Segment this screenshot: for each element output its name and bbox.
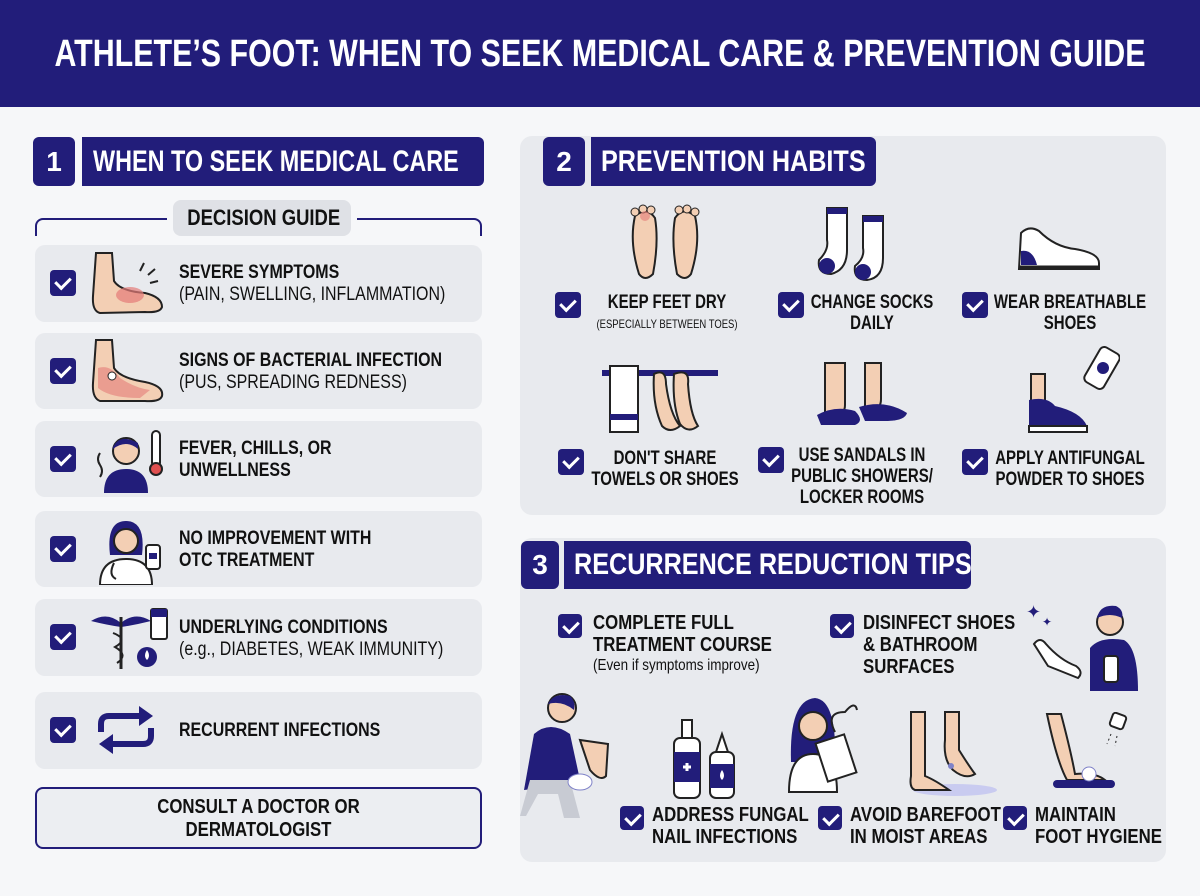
section 1 header: 1 bbox=[46, 146, 62, 177]
section 2 header bbox=[543, 137, 876, 186]
item: fungal nail infections: NAIL INFECTIONS bbox=[652, 826, 797, 848]
callout: consult a doctor bbox=[35, 787, 482, 849]
icon: woman with checklist bbox=[788, 698, 858, 793]
item: keep feet dry: KEEP FEET DRY bbox=[608, 292, 726, 313]
item: foot hygiene: FOOT HYGIENE bbox=[1035, 826, 1162, 848]
icon: man spraying shoe: ✦ bbox=[1026, 602, 1041, 622]
item: avoid barefoot bbox=[818, 804, 1001, 848]
row: recurrent infections: RECURRENT INFECTIONS bbox=[179, 720, 380, 741]
icon: person with thermometer bbox=[97, 430, 163, 493]
item: change socks daily: CHANGE SOCKS bbox=[811, 292, 933, 313]
item: keep feet dry bbox=[555, 292, 738, 331]
item: sandals in showers: PUBLIC SHOWERS/ bbox=[791, 466, 933, 487]
section 3 header bbox=[521, 541, 972, 589]
icon: kneeling man washing foot bbox=[520, 693, 610, 818]
icon: shoe with powder bbox=[1028, 346, 1120, 433]
row: bacterial infection bbox=[35, 333, 482, 409]
item: disinfect shoes: SURFACES bbox=[863, 656, 954, 678]
item: complete treatment course: TREATMENT COURSE bbox=[593, 634, 772, 656]
item: antifungal powder: APPLY ANTIFUNGAL bbox=[995, 448, 1145, 469]
section 1 header: WHEN TO SEEK MEDICAL CARE bbox=[93, 145, 459, 178]
item: breathable shoes bbox=[962, 292, 1146, 334]
item: complete treatment course: (Even if symptoms improve) bbox=[593, 657, 760, 674]
row: underlying conditions: UNDERLYING CONDITIONS bbox=[179, 617, 388, 638]
icon: sandals bbox=[817, 362, 907, 425]
icon: towel and rack bbox=[602, 365, 718, 433]
item: keep feet dry: (ESPECIALLY BETWEEN TOES) bbox=[596, 317, 738, 331]
item: foot hygiene: MAINTAIN bbox=[1035, 804, 1116, 826]
icon: bare feet on wet floor bbox=[910, 711, 997, 796]
item: don't share towels bbox=[558, 448, 739, 490]
section 3 header: 3 bbox=[532, 549, 548, 580]
row: severe symptoms bbox=[35, 245, 482, 322]
item: complete treatment course: COMPLETE FULL bbox=[593, 612, 734, 634]
row: fever: UNWELLNESS bbox=[179, 460, 291, 481]
item: complete treatment course bbox=[558, 612, 772, 674]
row: bacterial infection: SIGNS OF BACTERIAL INFECTION bbox=[179, 350, 442, 371]
icon: feet soles bbox=[630, 204, 700, 279]
panel: recurrence reduction tips bbox=[520, 538, 1166, 862]
row: no improvement bbox=[35, 511, 482, 587]
decision guide label bbox=[35, 200, 482, 236]
icon: foot with soap bbox=[1046, 712, 1128, 788]
row: underlying conditions bbox=[35, 599, 482, 676]
callout: consult a doctor: CONSULT A DOCTOR OR bbox=[157, 796, 360, 818]
item: avoid barefoot: AVOID BAREFOOT bbox=[850, 804, 1001, 826]
title: ATHLETE’S FOOT: WHEN TO SEEK MEDICAL CARE & PREVENTION GUIDE bbox=[54, 33, 1146, 75]
item: sandals in showers: USE SANDALS IN bbox=[799, 445, 925, 466]
item: sandals in showers: LOCKER ROOMS bbox=[800, 487, 924, 508]
icon: socks bbox=[818, 207, 884, 281]
row: severe symptoms: (PAIN, SWELLING, INFLAMMATION) bbox=[179, 284, 445, 305]
callout: consult a doctor: DERMATOLOGIST bbox=[186, 819, 331, 841]
item: foot hygiene bbox=[1003, 804, 1162, 848]
item: don't share towels: DON'T SHARE bbox=[614, 448, 716, 469]
item: disinfect shoes: & BATHROOM bbox=[863, 634, 977, 656]
row: fever bbox=[35, 421, 482, 497]
row: underlying conditions: (e.g., DIABETES, WEAK IMMUNITY) bbox=[179, 639, 443, 660]
row: no improvement: OTC TREATMENT bbox=[179, 550, 314, 571]
panel: prevention habits bbox=[520, 136, 1166, 515]
icon: man spraying shoe: ✦ bbox=[1042, 615, 1052, 629]
item: change socks daily: DAILY bbox=[850, 313, 894, 334]
item: fungal nail infections: ADDRESS FUNGAL bbox=[652, 804, 809, 826]
icon: recurrence arrows bbox=[98, 706, 154, 754]
icon: doctor with phone bbox=[99, 521, 161, 585]
row: severe symptoms: SEVERE SYMPTOMS bbox=[179, 262, 339, 283]
icon: infected foot bbox=[92, 339, 164, 402]
row: bacterial infection: (PUS, SPREADING REDNESS) bbox=[179, 372, 407, 393]
header banner bbox=[0, 0, 1200, 107]
icon: man spraying shoe bbox=[1026, 602, 1138, 691]
item: sandals in showers bbox=[758, 445, 933, 508]
item: disinfect shoes bbox=[830, 612, 1015, 678]
section 1 header bbox=[33, 137, 484, 186]
icon: bottles bbox=[673, 719, 735, 799]
section 3 header: RECURRENCE REDUCTION TIPS bbox=[574, 548, 972, 581]
row: recurrent infections bbox=[35, 692, 482, 769]
item: antifungal powder: POWDER TO SHOES bbox=[995, 469, 1145, 490]
item: breathable shoes: SHOES bbox=[1044, 313, 1096, 334]
item: antifungal powder bbox=[962, 448, 1145, 490]
row: no improvement: NO IMPROVEMENT WITH bbox=[179, 528, 371, 549]
item: don't share towels: TOWELS OR SHOES bbox=[591, 469, 739, 490]
icon: sneaker bbox=[1018, 227, 1100, 270]
item: avoid barefoot: IN MOIST AREAS bbox=[850, 826, 988, 848]
section 2 header: PREVENTION HABITS bbox=[601, 145, 866, 178]
decision guide label: DECISION GUIDE bbox=[187, 205, 340, 230]
section 2 header: 2 bbox=[556, 146, 572, 177]
icon: inflamed foot bbox=[92, 252, 163, 314]
item: breathable shoes: WEAR BREATHABLE bbox=[994, 292, 1146, 313]
item: change socks daily bbox=[778, 292, 933, 334]
icon: caduceus and insulin bbox=[91, 608, 168, 669]
item: fungal nail infections bbox=[620, 804, 809, 848]
item: disinfect shoes: DISINFECT SHOES bbox=[863, 612, 1015, 634]
row: fever: FEVER, CHILLS, OR bbox=[179, 438, 332, 459]
